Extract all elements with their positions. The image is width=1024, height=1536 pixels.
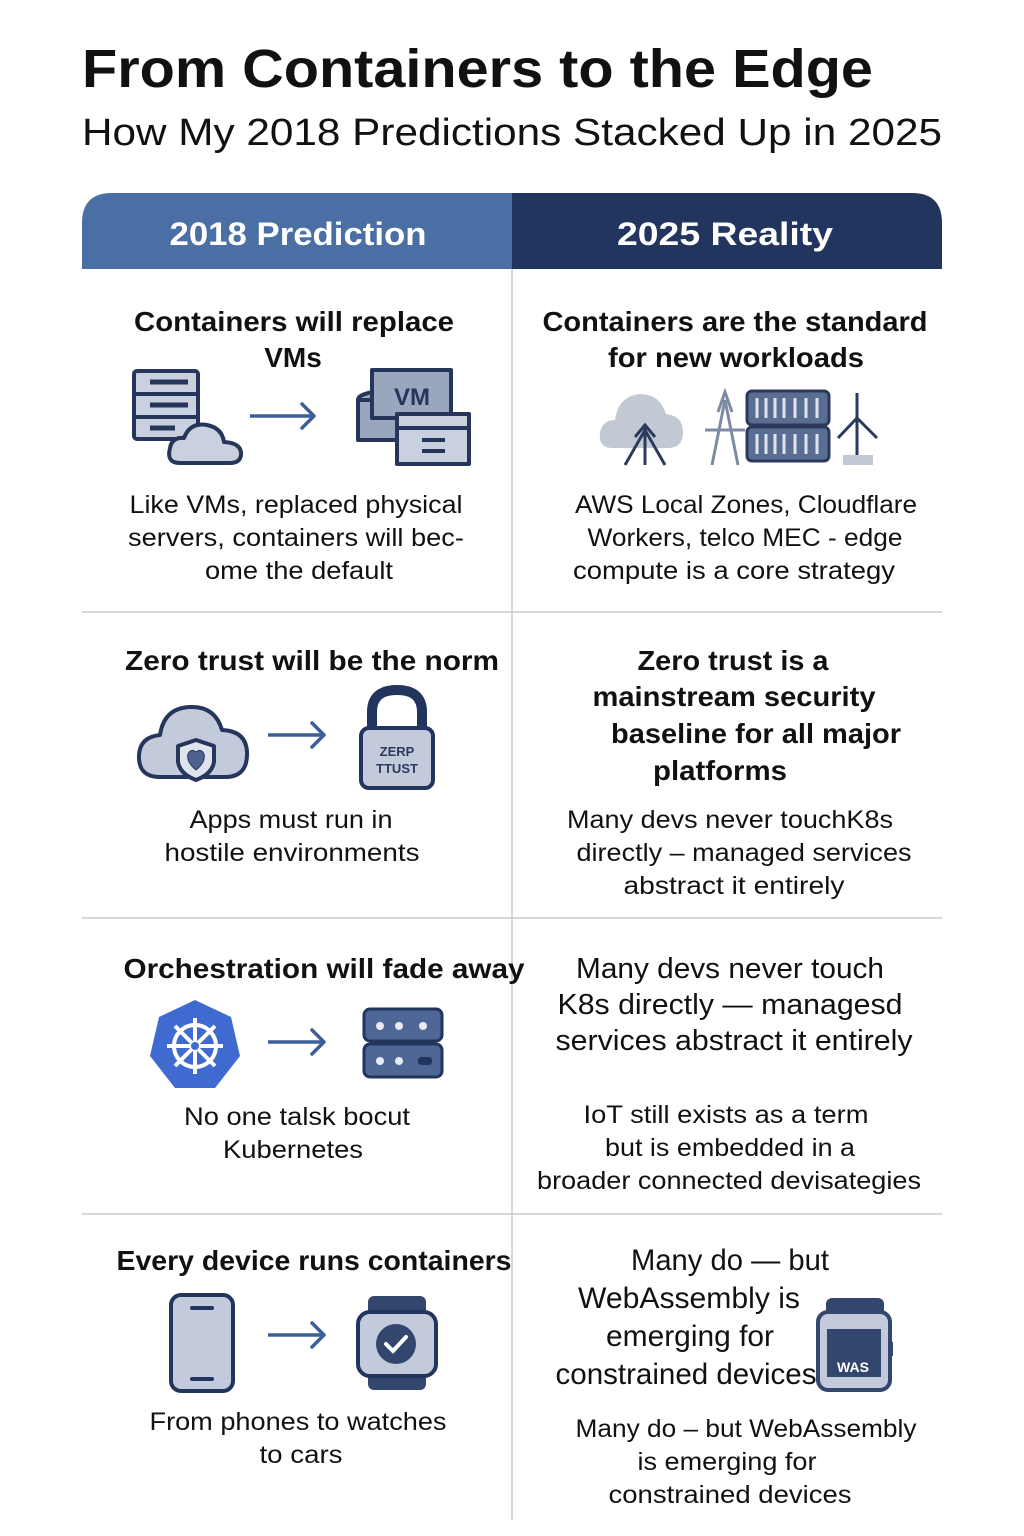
- table header: [82, 193, 942, 269]
- icon: watch with check: [358, 1296, 436, 1390]
- row 1 right: reality: AWS Local Zones, Cloudflare: [575, 491, 917, 519]
- title: From Containers to the Edge: [82, 39, 873, 99]
- row 2 left: prediction: [125, 645, 499, 867]
- row 2 right: reality: directly – managed services: [576, 839, 912, 867]
- arrow: [268, 1040, 324, 1044]
- header: 2025 Reality: 2025 Reality: [617, 216, 833, 252]
- row 4 right: reality: emerging for: [606, 1320, 774, 1353]
- row 4 left: prediction: From phones to watches: [150, 1408, 446, 1436]
- icon: server: [364, 1009, 442, 1077]
- row 2 left: prediction: hostile environments: [164, 839, 420, 867]
- row 3 right: reality: Many devs never touch: [576, 953, 884, 985]
- row 1 right: reality: Workers, telco MEC - edge: [588, 524, 902, 552]
- row 2 right: reality: [567, 645, 912, 900]
- row 3 right: reality: broader connected devisategies: [537, 1167, 921, 1195]
- arrow: [268, 1333, 324, 1337]
- row 3 left: prediction: No one talsk bocut: [184, 1103, 410, 1131]
- row 3 right: reality: K8s directly — managesd: [558, 989, 902, 1021]
- row 1 right: reality: for new workloads: [608, 342, 864, 373]
- row 1 right: reality: [542, 306, 928, 585]
- row 2 right: reality: mainstream security: [592, 681, 876, 712]
- row 3 left: prediction: Kubernetes: [223, 1136, 363, 1164]
- row 1 left: prediction: ome the default: [205, 557, 393, 585]
- icon: server with cloud: [134, 371, 241, 463]
- icon: WAS watch: [818, 1298, 893, 1390]
- icon: edge infrastructure: [600, 391, 877, 465]
- row 3 right: reality: services abstract it entirely: [556, 1025, 913, 1057]
- row 3 right: reality: [537, 953, 921, 1195]
- row 3 left: prediction: Orchestration will fade away: [124, 953, 525, 984]
- row 4 right: reality: is emerging for: [638, 1448, 816, 1476]
- row 2 right: reality: platforms: [653, 755, 787, 786]
- row 1 left: prediction: Containers will replace: [134, 306, 454, 337]
- row 3 right: reality: but is embedded in a: [605, 1134, 855, 1162]
- row 1 right: reality: Containers are the standard: [542, 306, 928, 337]
- row 2 right: reality: Zero trust is a: [638, 645, 829, 676]
- row 2 right: reality: abstract it entirely: [624, 872, 845, 900]
- icon: VM: VM: [394, 384, 430, 411]
- row 4 left: prediction: to cars: [260, 1441, 342, 1469]
- row 3 right: reality: IoT still exists as a term: [584, 1101, 868, 1129]
- icon: lock: ZERP: [380, 744, 415, 759]
- row 1 left: prediction: servers, containers will bec-: [128, 524, 464, 552]
- row 1 left: prediction: VMs: [264, 342, 322, 373]
- arrow: [268, 733, 324, 737]
- icon: kubernetes: [150, 1000, 240, 1088]
- row 2 left: prediction: Apps must run in: [190, 806, 392, 834]
- row 4 right: reality: constrained devices: [556, 1358, 816, 1391]
- icon: phone: [171, 1295, 233, 1391]
- row 3 left: prediction: [124, 953, 525, 1164]
- icon: cloud with shield: [139, 707, 247, 780]
- row 2 right: reality: Many devs never touchK8s: [567, 806, 893, 834]
- icon: WAS watch: WAS: [837, 1359, 869, 1375]
- row 4 right: reality: WebAssembly is: [578, 1282, 800, 1315]
- row 4 left: prediction: [116, 1245, 512, 1469]
- row 4 right: reality: [556, 1244, 917, 1509]
- subtitle: How My 2018 Predictions Stacked Up in 2025: [82, 112, 942, 154]
- row 2 left: prediction: Zero trust will be the norm: [125, 645, 499, 676]
- icon: lock: TTUST: [376, 761, 418, 776]
- header: 2018 Prediction: 2018 Prediction: [170, 216, 426, 252]
- icon: VM: [358, 370, 469, 464]
- row 1 left: prediction: [128, 306, 469, 585]
- row 4 right: reality: Many do – but WebAssembly: [576, 1415, 917, 1443]
- row 1 right: reality: compute is a core strategy: [573, 557, 896, 585]
- row 4 right: reality: Many do — but: [631, 1244, 830, 1277]
- row 4 right: reality: constrained devices: [608, 1481, 852, 1509]
- row 1 left: prediction: Like VMs, replaced physical: [130, 491, 463, 519]
- row 4 left: prediction: Every device runs containers: [116, 1245, 512, 1276]
- icon: lock: [361, 690, 433, 788]
- arrow: [250, 414, 314, 418]
- row 2 right: reality: baseline for all major: [611, 718, 901, 749]
